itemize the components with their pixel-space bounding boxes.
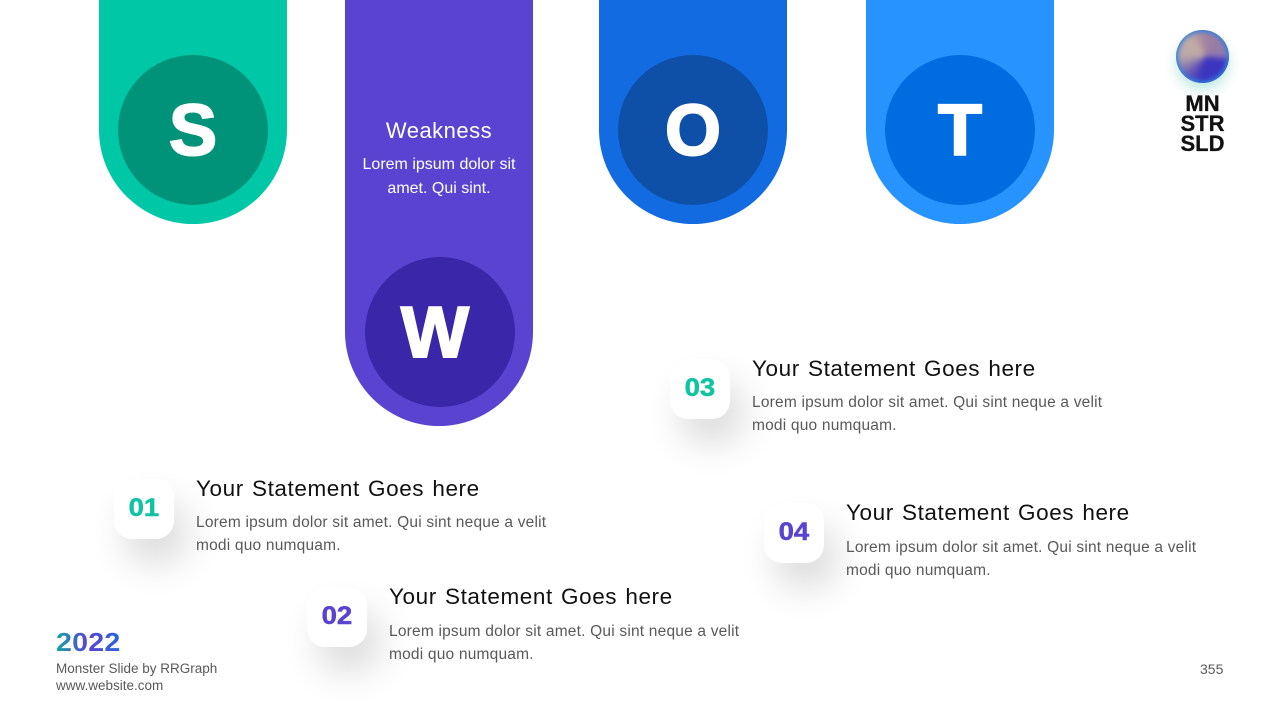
badge: 03 bbox=[670, 359, 730, 419]
circle: S letter: S bbox=[169, 91, 217, 171]
badge: 04 bbox=[764, 503, 824, 563]
text: item 03 bbox=[752, 394, 1102, 434]
item 04 bbox=[766, 500, 1196, 597]
heading: item 03: Your Statement Goes here bbox=[752, 356, 1036, 381]
text: item 04: Lorem ipsum dolor sit amet. Qui sint neque a velit bbox=[846, 539, 1196, 556]
text: item 01: Lorem ipsum dolor sit amet. Qui sint neque a velit bbox=[196, 514, 546, 531]
year 2022: 2022 bbox=[56, 627, 121, 657]
circle: T letter bbox=[885, 55, 1035, 205]
text: item 03: modi quo numquam. bbox=[752, 417, 897, 434]
text: item 02 bbox=[389, 623, 739, 663]
pill: T threats bbox=[866, 0, 1054, 224]
logo text: STR bbox=[1180, 111, 1224, 136]
text: weakness description: Lorem ipsum dolor sit bbox=[363, 156, 515, 173]
badge: 03: 03 bbox=[685, 374, 715, 402]
footer text: www.website.com bbox=[56, 678, 163, 692]
badge: 02: 02 bbox=[322, 602, 352, 630]
text: item 04 bbox=[846, 539, 1196, 579]
item 03 bbox=[672, 356, 1102, 453]
circle: O letter: O bbox=[665, 91, 721, 171]
heading: item 01: Your Statement Goes here bbox=[196, 476, 480, 501]
text: item 02: modi quo numquam. bbox=[389, 646, 534, 663]
logo text: SLD bbox=[1180, 131, 1224, 156]
heading: item 04: Your Statement Goes here bbox=[846, 500, 1130, 525]
text: item 02: Lorem ipsum dolor sit amet. Qui sint neque a velit bbox=[389, 623, 739, 640]
circle: W letter bbox=[365, 257, 515, 407]
footer text bbox=[56, 661, 217, 692]
pill: W weakness bbox=[345, 0, 533, 426]
badge: 01 bbox=[114, 479, 174, 539]
circle: T letter: T bbox=[938, 91, 982, 171]
text: item 01: modi quo numquam. bbox=[196, 537, 341, 554]
logo icon: gradient sphere bbox=[1176, 30, 1229, 83]
text: item 01 bbox=[196, 514, 546, 554]
pill: O opportunities bbox=[599, 0, 787, 224]
circle: O letter bbox=[618, 55, 768, 205]
circle: S letter bbox=[118, 55, 268, 205]
text: weakness heading: Weakness bbox=[386, 118, 492, 143]
circle: W letter: W bbox=[401, 293, 469, 373]
text: weakness description: amet. Qui sint. bbox=[387, 180, 491, 196]
item 01 bbox=[116, 476, 546, 573]
text: item 03: Lorem ipsum dolor sit amet. Qui sint neque a velit bbox=[752, 394, 1102, 411]
logo text: MN bbox=[1185, 91, 1220, 116]
page number: 355 bbox=[1200, 661, 1223, 677]
item 02 bbox=[309, 584, 739, 681]
text: item 04: modi quo numquam. bbox=[846, 562, 991, 579]
footer text: Monster Slide by RRGraph bbox=[56, 661, 217, 676]
text: weakness description bbox=[363, 156, 516, 196]
badge: 01: 01 bbox=[129, 494, 159, 522]
badge: 04: 04 bbox=[779, 518, 809, 546]
badge: 02 bbox=[307, 587, 367, 647]
pill: S strength bbox=[99, 0, 287, 224]
logo text bbox=[1180, 91, 1224, 156]
heading: item 02: Your Statement Goes here bbox=[389, 584, 673, 609]
